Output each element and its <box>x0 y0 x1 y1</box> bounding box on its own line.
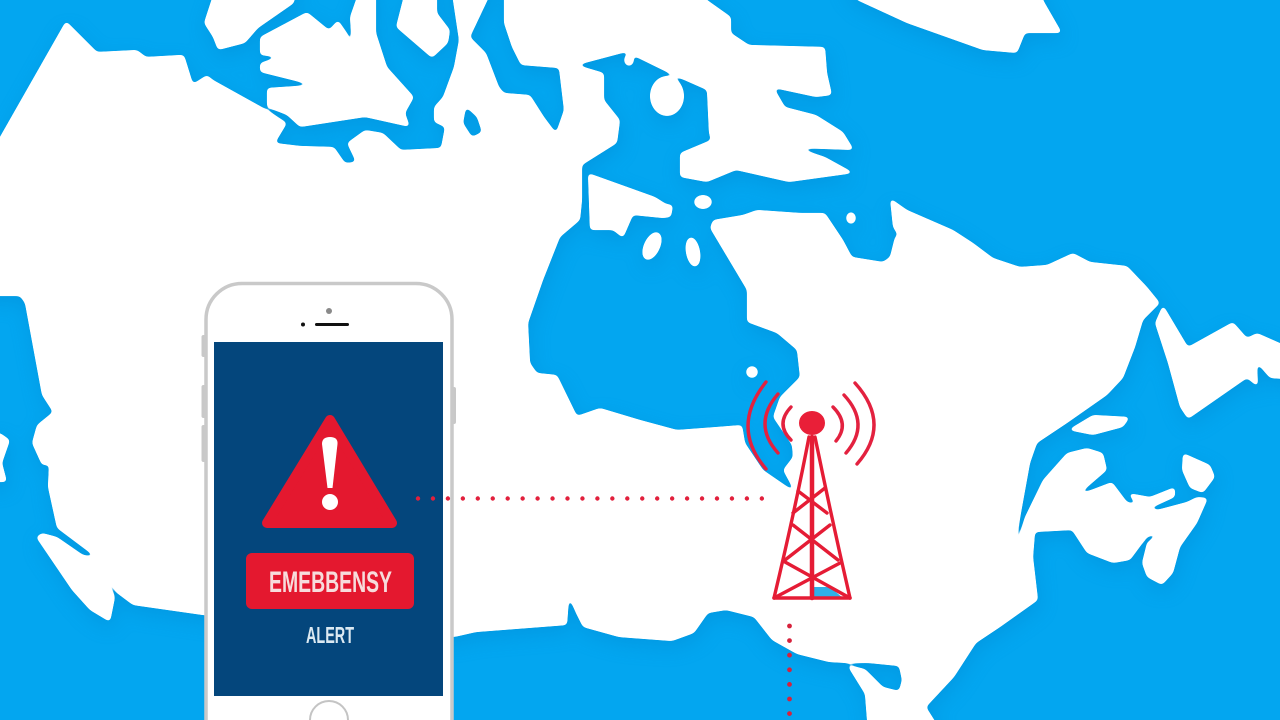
arctic island north-east <box>840 0 1062 53</box>
side buttons <box>202 335 456 462</box>
arctic island west <box>204 0 298 50</box>
Newfoundland <box>1155 305 1280 419</box>
Cape Breton island <box>1182 453 1215 493</box>
arctic island centre <box>260 0 414 127</box>
Vancouver island <box>36 533 115 622</box>
exclamation mark <box>322 437 338 510</box>
bay islets <box>650 76 684 116</box>
home button <box>310 701 348 720</box>
Southampton island <box>588 173 673 238</box>
camera and speaker <box>301 308 349 326</box>
lattice <box>774 437 850 598</box>
dotted line: tower downward <box>787 626 792 720</box>
dotted line: tower to phone <box>418 496 762 501</box>
radio tower <box>748 382 874 598</box>
phone body <box>206 284 452 720</box>
signal waves <box>748 382 874 469</box>
emergency banner <box>246 553 414 609</box>
screen <box>214 342 443 696</box>
blue patch at the base <box>813 587 843 598</box>
smartphone <box>202 284 456 720</box>
west coast islet <box>0 433 10 482</box>
PEI crescent <box>1128 487 1175 507</box>
alert text: ALERT <box>306 622 354 648</box>
tower beacon <box>799 411 825 435</box>
banner text: EMEBBENSY <box>269 566 392 599</box>
arctic island north <box>396 0 450 58</box>
Anticosti island <box>1068 415 1130 435</box>
warning triangle <box>267 420 392 523</box>
